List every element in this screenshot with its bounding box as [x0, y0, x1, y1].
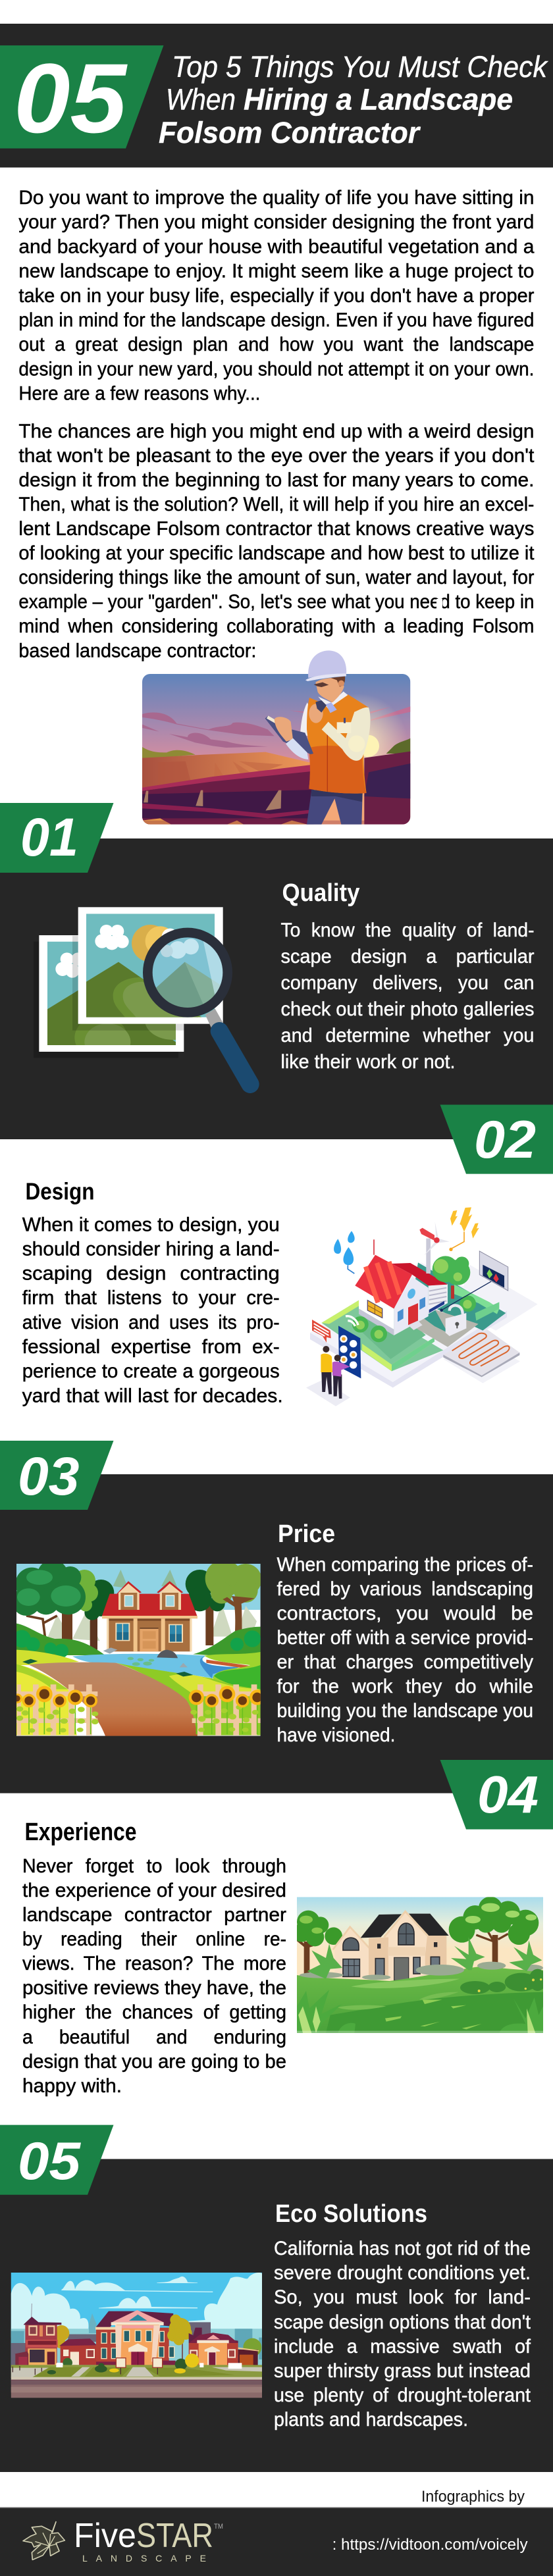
text: Experience body: Never forget to look through: [22, 1855, 286, 1877]
badge 04: 04: [477, 1765, 539, 1824]
text: Price body: er that charges competitively: [276, 1651, 533, 1673]
text: Experience body: higher the chances of getting: [22, 2001, 286, 2023]
badge 05: [0, 2125, 113, 2195]
icon: maple leaf: [23, 2522, 65, 2560]
text: Quality body: company delivers, you can: [280, 972, 535, 994]
intro paragraph 1: new landscape to enjoy. It might seem like a huge project to: [18, 261, 534, 282]
badge 02: [440, 1104, 553, 1174]
intro paragraph 2: design it from the beginning to last for many years to come.: [18, 469, 534, 491]
text: Design body: ative vision and uses its pro-: [22, 1312, 280, 1333]
badge 04: [440, 1760, 553, 1830]
illustration: isometric smart house: [306, 1207, 538, 1406]
intro paragraph 2: The chances are high you might end up with a weird design: [18, 421, 534, 442]
text: Design body: should consider hiring a land-: [22, 1238, 280, 1260]
intro paragraph 1: Do you want to improve the quality of life you have sitting in: [18, 187, 534, 209]
header band: [0, 24, 553, 167]
text: Eco Solutions body: [274, 2238, 531, 2431]
logo: FiveSTAR Landscape: STAR: [136, 2517, 213, 2555]
text: Price body: When comparing the prices of-: [276, 1554, 533, 1576]
logo: FiveSTAR Landscape: TM: [214, 2523, 223, 2531]
text: Price body: fered by various landscaping: [276, 1578, 533, 1600]
intro paragraph 2: that won't be pleasant to the eye over the years if you don't: [18, 445, 535, 467]
intro paragraph 2: lent Landscape Folsom contractor that knows creative ways: [18, 518, 534, 540]
icon: photos under magnifying glass: [34, 907, 250, 1084]
text: Price body: better off with a service provid-: [276, 1627, 533, 1649]
text: Experience body: positive reviews they have, the: [22, 1977, 286, 1999]
title: [159, 50, 548, 149]
section 05 band: [0, 2159, 553, 2472]
text: Design body: scaping design contracting: [22, 1262, 280, 1285]
text: Eco Solutions body: super thirsty grass but instead: [274, 2360, 531, 2382]
text: Price body: building you the landscape you: [276, 1700, 533, 1722]
title: Hiring a Landscape: [244, 83, 513, 116]
intro paragraph 2: considering things like the amount of sun, water and layout, for: [18, 567, 534, 588]
intro paragraph 1: your yard? Then you might consider designing the front yard: [18, 211, 534, 233]
badge 05: 05: [18, 2132, 81, 2191]
text: Design body: perience to create a gorgeous: [22, 1360, 280, 1382]
illustration: brick house with pond and sunflowers: [12, 1560, 265, 1736]
text: Design body: fessional expertise from ex-: [22, 1336, 280, 1358]
intro paragraph 2: of looking at your specific landscape and how best to utilize it: [18, 542, 535, 564]
intro paragraph 1: [18, 187, 535, 405]
footer link: : https://vidtoon.com/voicely: [332, 2536, 528, 2554]
text: Experience body: by reading their online re-: [22, 1928, 286, 1950]
title: When: [166, 83, 236, 116]
text: Experience body: a beautiful and enduring: [22, 2026, 286, 2048]
intro paragraph 1: and backyard of your house with beautiful vegetation and a: [18, 236, 535, 257]
intro paragraph 1: Here are a few reasons why...: [18, 383, 260, 405]
footer credit: Infographics by: Infographics by: [421, 2488, 525, 2506]
text: Eco Solutions body: use plenty of drought-tolerant: [274, 2384, 531, 2406]
header number badge: 05: [14, 43, 128, 153]
heading: Eco Solutions: Eco Solutions: [275, 2200, 427, 2228]
header number badge: [0, 43, 163, 153]
heading: Design: Design: [25, 1178, 95, 1205]
text: Experience body: landscape contractor partner: [22, 1904, 286, 1926]
intro paragraph 1: take on in your busy life, especially if you don't have a proper: [18, 285, 534, 307]
text: Price body: [276, 1554, 533, 1746]
logo: FiveSTAR Landscape: [23, 2517, 223, 2563]
text: Design body: yard that will last for decades.: [22, 1385, 283, 1407]
text: Price body: have visioned.: [276, 1724, 395, 1746]
section 03 band: [0, 1474, 553, 1793]
logo: FiveSTAR Landscape: Five: [74, 2517, 136, 2555]
heading: Price: Price: [278, 1520, 335, 1548]
heading: Quality: Quality: [282, 879, 359, 907]
text: Price body: for the work they do while: [276, 1676, 533, 1697]
text: Eco Solutions body: severe drought conditions yet.: [274, 2262, 531, 2284]
text: Quality body: scape design a particular: [280, 946, 535, 967]
text: Eco Solutions body: plants and hardscapes.: [274, 2409, 468, 2431]
text: Quality body: and determine whether you: [280, 1025, 535, 1046]
heading: Experience: Experience: [25, 1818, 137, 1846]
illustration: engineer at sunset: [142, 650, 410, 825]
badge 03: [0, 1441, 113, 1510]
intro paragraph 2: mind when considering collaborating with a leading Folsom: [18, 615, 534, 637]
illustration: beige house with lawn: [292, 1897, 546, 2033]
text: Experience body: design that you are going to be: [22, 2051, 286, 2073]
text: Experience body: [22, 1855, 286, 2097]
badge 01: 01: [20, 808, 78, 867]
text: Quality body: To know the quality of land-: [280, 919, 535, 941]
text: Quality body: [280, 919, 535, 1073]
text: Price body: contractors, you would be: [276, 1603, 533, 1624]
footer band: [0, 2507, 553, 2576]
intro paragraph 2: based landscape contractor:: [18, 640, 256, 662]
intro paragraph 1: out a great design plan and how you want the landscape: [18, 334, 534, 355]
text: Eco Solutions body: include a massive swath of: [274, 2336, 531, 2357]
badge 01: [0, 803, 113, 873]
text: Design body: [22, 1214, 283, 1407]
section 01 band: [0, 838, 553, 1139]
text: Experience body: views. The reason? The more: [22, 1953, 286, 1974]
intro paragraph 1: plan in mind for the landscape design. Even if you have figured: [18, 309, 534, 331]
text: Design body: When it comes to design, you: [22, 1214, 280, 1235]
intro paragraph 2: [18, 421, 535, 662]
text: Experience body: the experience of your desired: [22, 1880, 286, 1901]
text: Quality body: check out their photo galleries: [280, 998, 535, 1020]
illustration: suburban street of houses: [11, 2273, 262, 2398]
logo: FiveSTAR Landscape: LANDSCAPE: [82, 2553, 206, 2563]
text: Eco Solutions body: So, you must look for land-: [274, 2286, 531, 2308]
badge 03: 03: [18, 1447, 79, 1507]
text: Eco Solutions body: scape design options that don't: [274, 2311, 531, 2333]
title: Folsom Contractor: [159, 116, 421, 149]
text: Design body: firm that listens to your cre-: [22, 1287, 280, 1309]
text: Experience body: happy with.: [22, 2075, 122, 2097]
badge 02: 02: [474, 1110, 536, 1170]
text: Eco Solutions body: California has not got rid of the: [274, 2238, 531, 2259]
text: Quality body: like their work or not.: [280, 1051, 456, 1073]
